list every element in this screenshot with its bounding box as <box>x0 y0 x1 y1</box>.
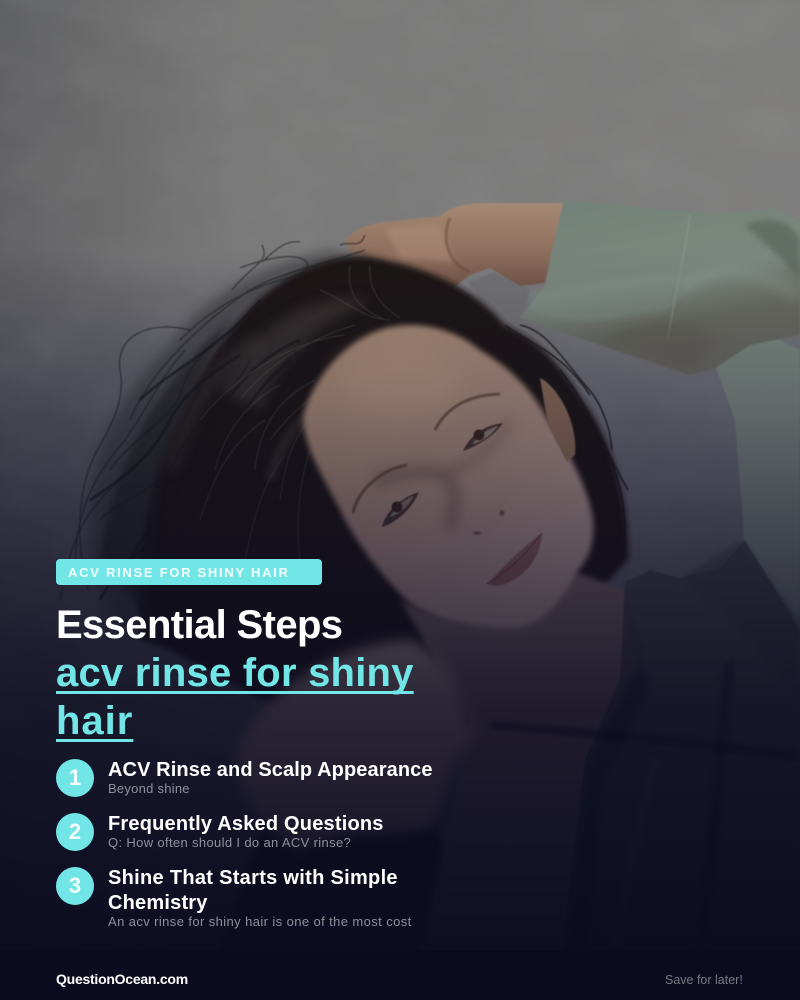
frizzy outer strands <box>60 235 365 600</box>
step 3 <box>56 867 412 929</box>
eye socket shadows <box>375 472 455 530</box>
face <box>303 325 593 628</box>
step 3: An acv rinse for shiny hair is one of the most cost <box>108 914 412 929</box>
dark clothing <box>490 540 800 960</box>
nose <box>460 495 505 539</box>
blurred foreground hand <box>239 640 472 850</box>
step 3: Chemistry <box>108 892 208 914</box>
sleeve <box>520 200 800 640</box>
wisps on right side <box>505 325 628 560</box>
category tag: ACV RINSE FOR SHINY HAIR <box>68 565 290 580</box>
step 2 <box>56 813 384 851</box>
left eye <box>382 492 419 527</box>
hair mass <box>60 235 628 950</box>
step 1 <box>56 759 433 797</box>
step 2: 2 <box>69 819 81 844</box>
step 1: Beyond shine <box>108 781 190 796</box>
step 1: ACV Rinse and Scalp Appearance <box>108 759 433 781</box>
title: acv rinse for shiny <box>56 651 414 695</box>
title: Essential Steps <box>56 603 342 647</box>
step 1: 1 <box>69 765 81 790</box>
cuff under wrist <box>468 272 565 375</box>
footer bar <box>0 956 800 1000</box>
step 3: 3 <box>69 873 81 898</box>
step 2: Frequently Asked Questions <box>108 813 384 835</box>
category tag <box>56 559 322 585</box>
footer bar: QuestionOcean.com <box>56 971 188 987</box>
brows <box>353 394 500 513</box>
step 2: Q: How often should I do an ACV rinse? <box>108 835 351 850</box>
neck and chest <box>400 570 640 960</box>
hand and wrist <box>346 203 563 292</box>
grey highlight strands <box>200 265 400 560</box>
footer bar: Save for later! <box>665 973 743 987</box>
title: hair <box>56 699 133 743</box>
step 3: Shine That Starts with Simple <box>108 867 398 889</box>
right eye <box>463 423 503 451</box>
ear <box>540 378 575 462</box>
title <box>56 603 414 743</box>
lips <box>487 533 542 586</box>
